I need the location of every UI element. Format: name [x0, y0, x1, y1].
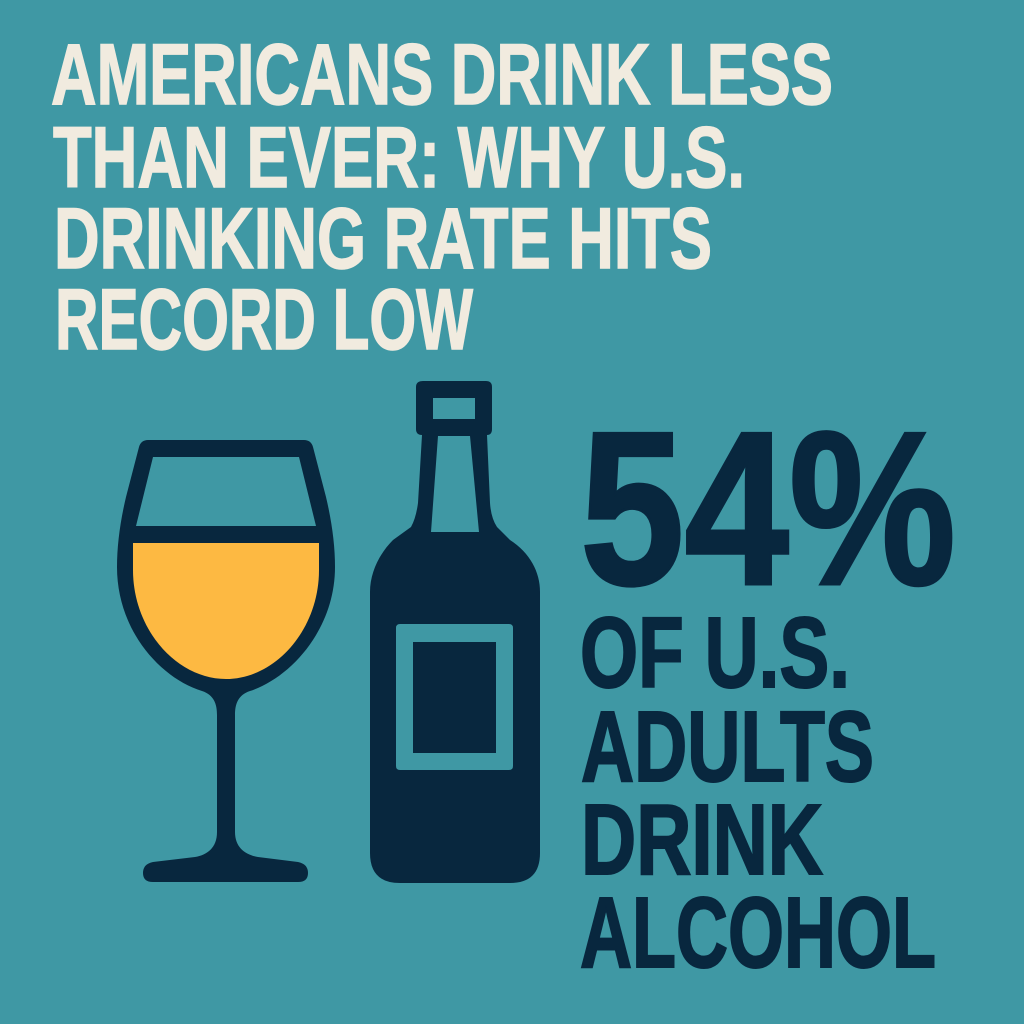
statistic: 54%: 54% — [580, 387, 956, 631]
statistic label: DRINK — [581, 784, 823, 896]
statistic label: OF U.S. — [580, 597, 850, 709]
wine fill — [133, 543, 319, 679]
title — [51, 27, 833, 368]
statistic label: ADULTS — [581, 691, 874, 803]
icon: bottle — [370, 381, 540, 883]
statistic label — [580, 597, 936, 989]
title: RECORD LOW — [55, 272, 474, 368]
title: DRINKING RATE HITS — [54, 191, 712, 287]
icon: wine glass — [117, 440, 335, 882]
title: THAN EVER: WHY U.S. — [53, 110, 745, 206]
bottle label — [396, 624, 513, 770]
